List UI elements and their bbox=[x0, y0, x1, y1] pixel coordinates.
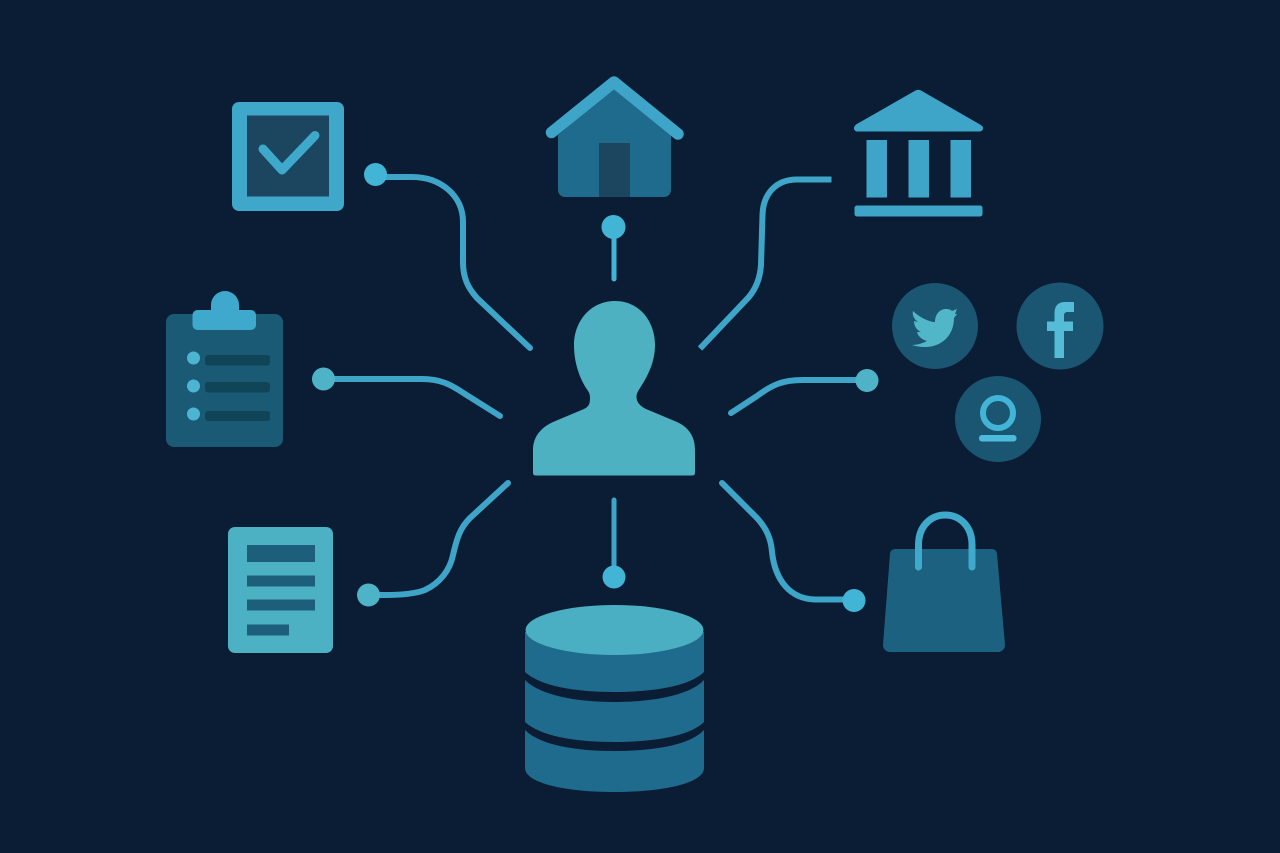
icon: twitter badge bbox=[892, 283, 978, 369]
icon: bank bbox=[854, 90, 983, 216]
connector: person to shopping bag bbox=[722, 483, 866, 612]
icon: document bbox=[228, 527, 333, 653]
icon: checkbox bbox=[232, 102, 344, 211]
connector: checkbox to person bbox=[364, 163, 530, 348]
icon: central person bbox=[533, 301, 695, 476]
icon: third social badge bbox=[955, 376, 1041, 462]
connector: house to person bbox=[602, 215, 626, 279]
icon: database bbox=[525, 605, 704, 792]
connector: bank to person bbox=[700, 180, 832, 348]
connector: clipboard to person bbox=[312, 368, 500, 416]
icon: shopping bag bbox=[883, 515, 1005, 652]
connector: document to person bbox=[357, 483, 508, 606]
icon: clipboard bbox=[166, 291, 283, 447]
connector: person to database bbox=[602, 500, 626, 588]
icon: house bbox=[552, 82, 678, 197]
icon: facebook badge bbox=[1016, 282, 1104, 370]
connector: social to person bbox=[731, 369, 878, 413]
